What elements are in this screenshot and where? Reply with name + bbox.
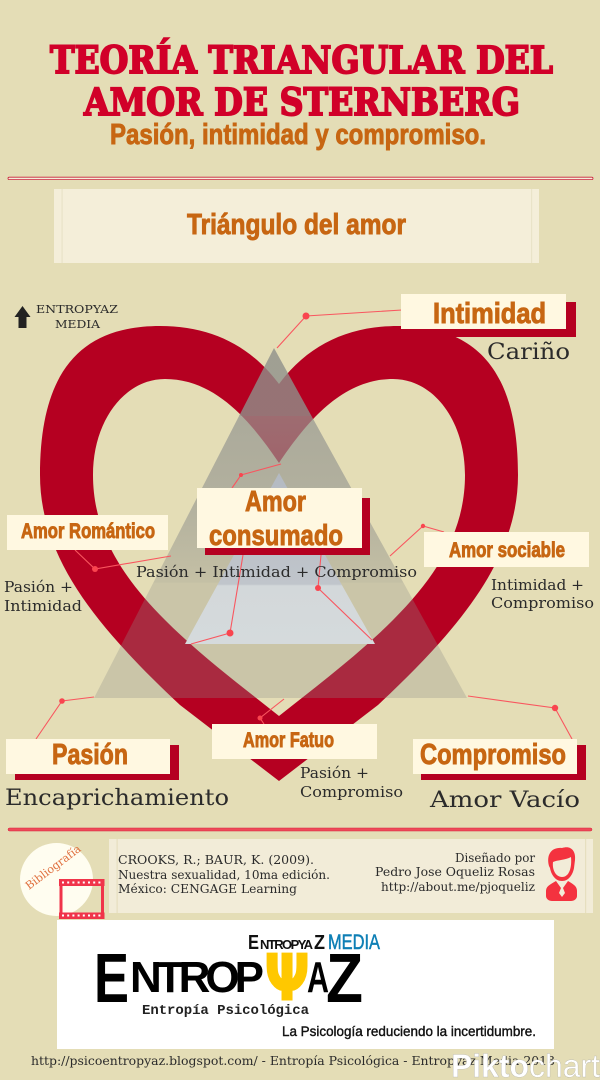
label: Intimidad: Intimidad	[433, 298, 546, 330]
logo: tagline mono: Entropía Psicológica	[142, 1003, 310, 1019]
panel: bibliography	[109, 839, 593, 913]
logo: Entropyaz Media small	[248, 931, 380, 954]
label: Compromiso: Compromiso	[420, 739, 566, 771]
label: Amor sociable	[424, 532, 589, 567]
text: Pasión + Intimidad: Intimidad	[4, 597, 82, 615]
label: Intimidad	[401, 294, 576, 337]
label: Pasión: Pasión	[52, 739, 128, 771]
connector: Amor sociable	[390, 524, 444, 556]
label: Amor consumado: consumado	[209, 520, 343, 552]
connector: Amor Romántico	[75, 550, 171, 572]
title	[50, 38, 553, 124]
logo: Entropyaz large: E	[94, 939, 129, 1017]
subtitle: Pasión, intimidad y compromiso.	[110, 119, 486, 151]
label: Amor consumado	[197, 486, 370, 555]
logo: Entropyaz large: Z	[326, 939, 363, 1017]
text: reference: CROOKS, R.; BAUR, K. (2009).	[118, 853, 314, 867]
text: Intimidad + Compromiso: Intimidad +	[491, 576, 584, 594]
brand label: Entropyaz Media: ENTROPYAZ	[36, 303, 118, 316]
text: Encaprichamiento: Encaprichamiento	[5, 786, 229, 811]
label: Amor Fatuo: Amor Fatuo	[243, 729, 334, 752]
label: Amor Fatuo	[212, 724, 377, 759]
chart: love triangle	[94, 348, 467, 698]
watermark: Piktochart	[451, 1048, 600, 1080]
footer text: http://psicoentropyaz.blogspot.com/ - Entropía Psicológica - Entropyaz Media 2013	[31, 1054, 555, 1068]
text: Pasión + Intimidad + Compromiso: Pasión + Intimidad + Compromiso	[136, 563, 417, 581]
label: Amor consumado: Amor	[245, 486, 306, 518]
connector: Intimidad	[277, 310, 402, 348]
connector: Amor consumado left	[191, 555, 243, 644]
heart	[40, 326, 518, 781]
connector: Amor Fatuo	[258, 699, 284, 724]
label: Pasión	[6, 739, 179, 780]
text: reference: México: CENGAGE Learning	[118, 882, 297, 896]
panel: triangle heading	[54, 189, 539, 263]
text: Intimidad + Compromiso	[491, 576, 594, 612]
logo: Entropyaz Media small: Z	[314, 932, 325, 954]
label: Amor sociable: Amor sociable	[449, 539, 565, 562]
text: reference: Nuestra sexualidad, 10ma edición.	[118, 868, 330, 882]
text: Pasión + Intimidad	[4, 578, 82, 615]
text: Amor Vacío: Amor Vacío	[429, 788, 580, 813]
text: Pasión + Compromiso	[300, 764, 403, 801]
connector: Pasión	[36, 697, 94, 739]
brand label: Entropyaz Media: MEDIA	[55, 318, 101, 331]
logo: Entropyaz Media small: E	[248, 932, 259, 954]
logo: slogan: La Psicología reduciendo la incertidumbre.	[282, 1023, 536, 1039]
text: credits: http://about.me/pjoqueliz	[381, 880, 535, 894]
text: Pasión + Intimidad: Pasión +	[4, 578, 73, 596]
title: TEORÍA TRIANGULAR DEL	[50, 38, 553, 82]
connector: Amor consumado right	[315, 555, 372, 640]
text: reference	[118, 853, 330, 896]
bibliography badge	[20, 842, 93, 916]
connector: Compromiso	[468, 696, 572, 739]
text: credits: Pedro Jose Oqueliz Rosas	[375, 865, 535, 879]
logo: Entropyaz large: Ψ	[264, 942, 310, 1016]
logo panel	[57, 920, 554, 1049]
title: AMOR DE STERNBERG	[83, 80, 520, 124]
icon: person	[546, 847, 577, 901]
label: Amor Romántico	[7, 515, 168, 550]
label: Amor Romántico: Amor Romántico	[21, 520, 155, 543]
logo: Entropyaz large: NTROP	[130, 953, 264, 1002]
heading: triángulo del amor: Triángulo del amor	[187, 209, 406, 241]
icon: film strip	[59, 879, 104, 919]
logo: Entropyaz Media small: NTROPYA	[260, 937, 314, 952]
bibliography badge: Bibliografía	[23, 842, 84, 892]
connector: Amor consumado to apex	[232, 464, 281, 488]
text: Cariño: Cariño	[487, 340, 570, 365]
logo: Entropyaz large: A	[307, 953, 329, 1002]
text: Intimidad + Compromiso: Compromiso	[491, 594, 594, 612]
text: Pasión + Compromiso: Pasión +	[300, 764, 369, 782]
logo: Entropyaz Media small: MEDIA	[328, 931, 380, 954]
icon: up arrow	[14, 306, 30, 328]
brand label: Entropyaz Media	[36, 303, 118, 331]
logo: Entropyaz large	[94, 939, 363, 1017]
text: Pasión + Compromiso: Compromiso	[300, 783, 403, 801]
text: credits	[375, 851, 535, 894]
text: credits: Diseñado por	[455, 851, 535, 865]
